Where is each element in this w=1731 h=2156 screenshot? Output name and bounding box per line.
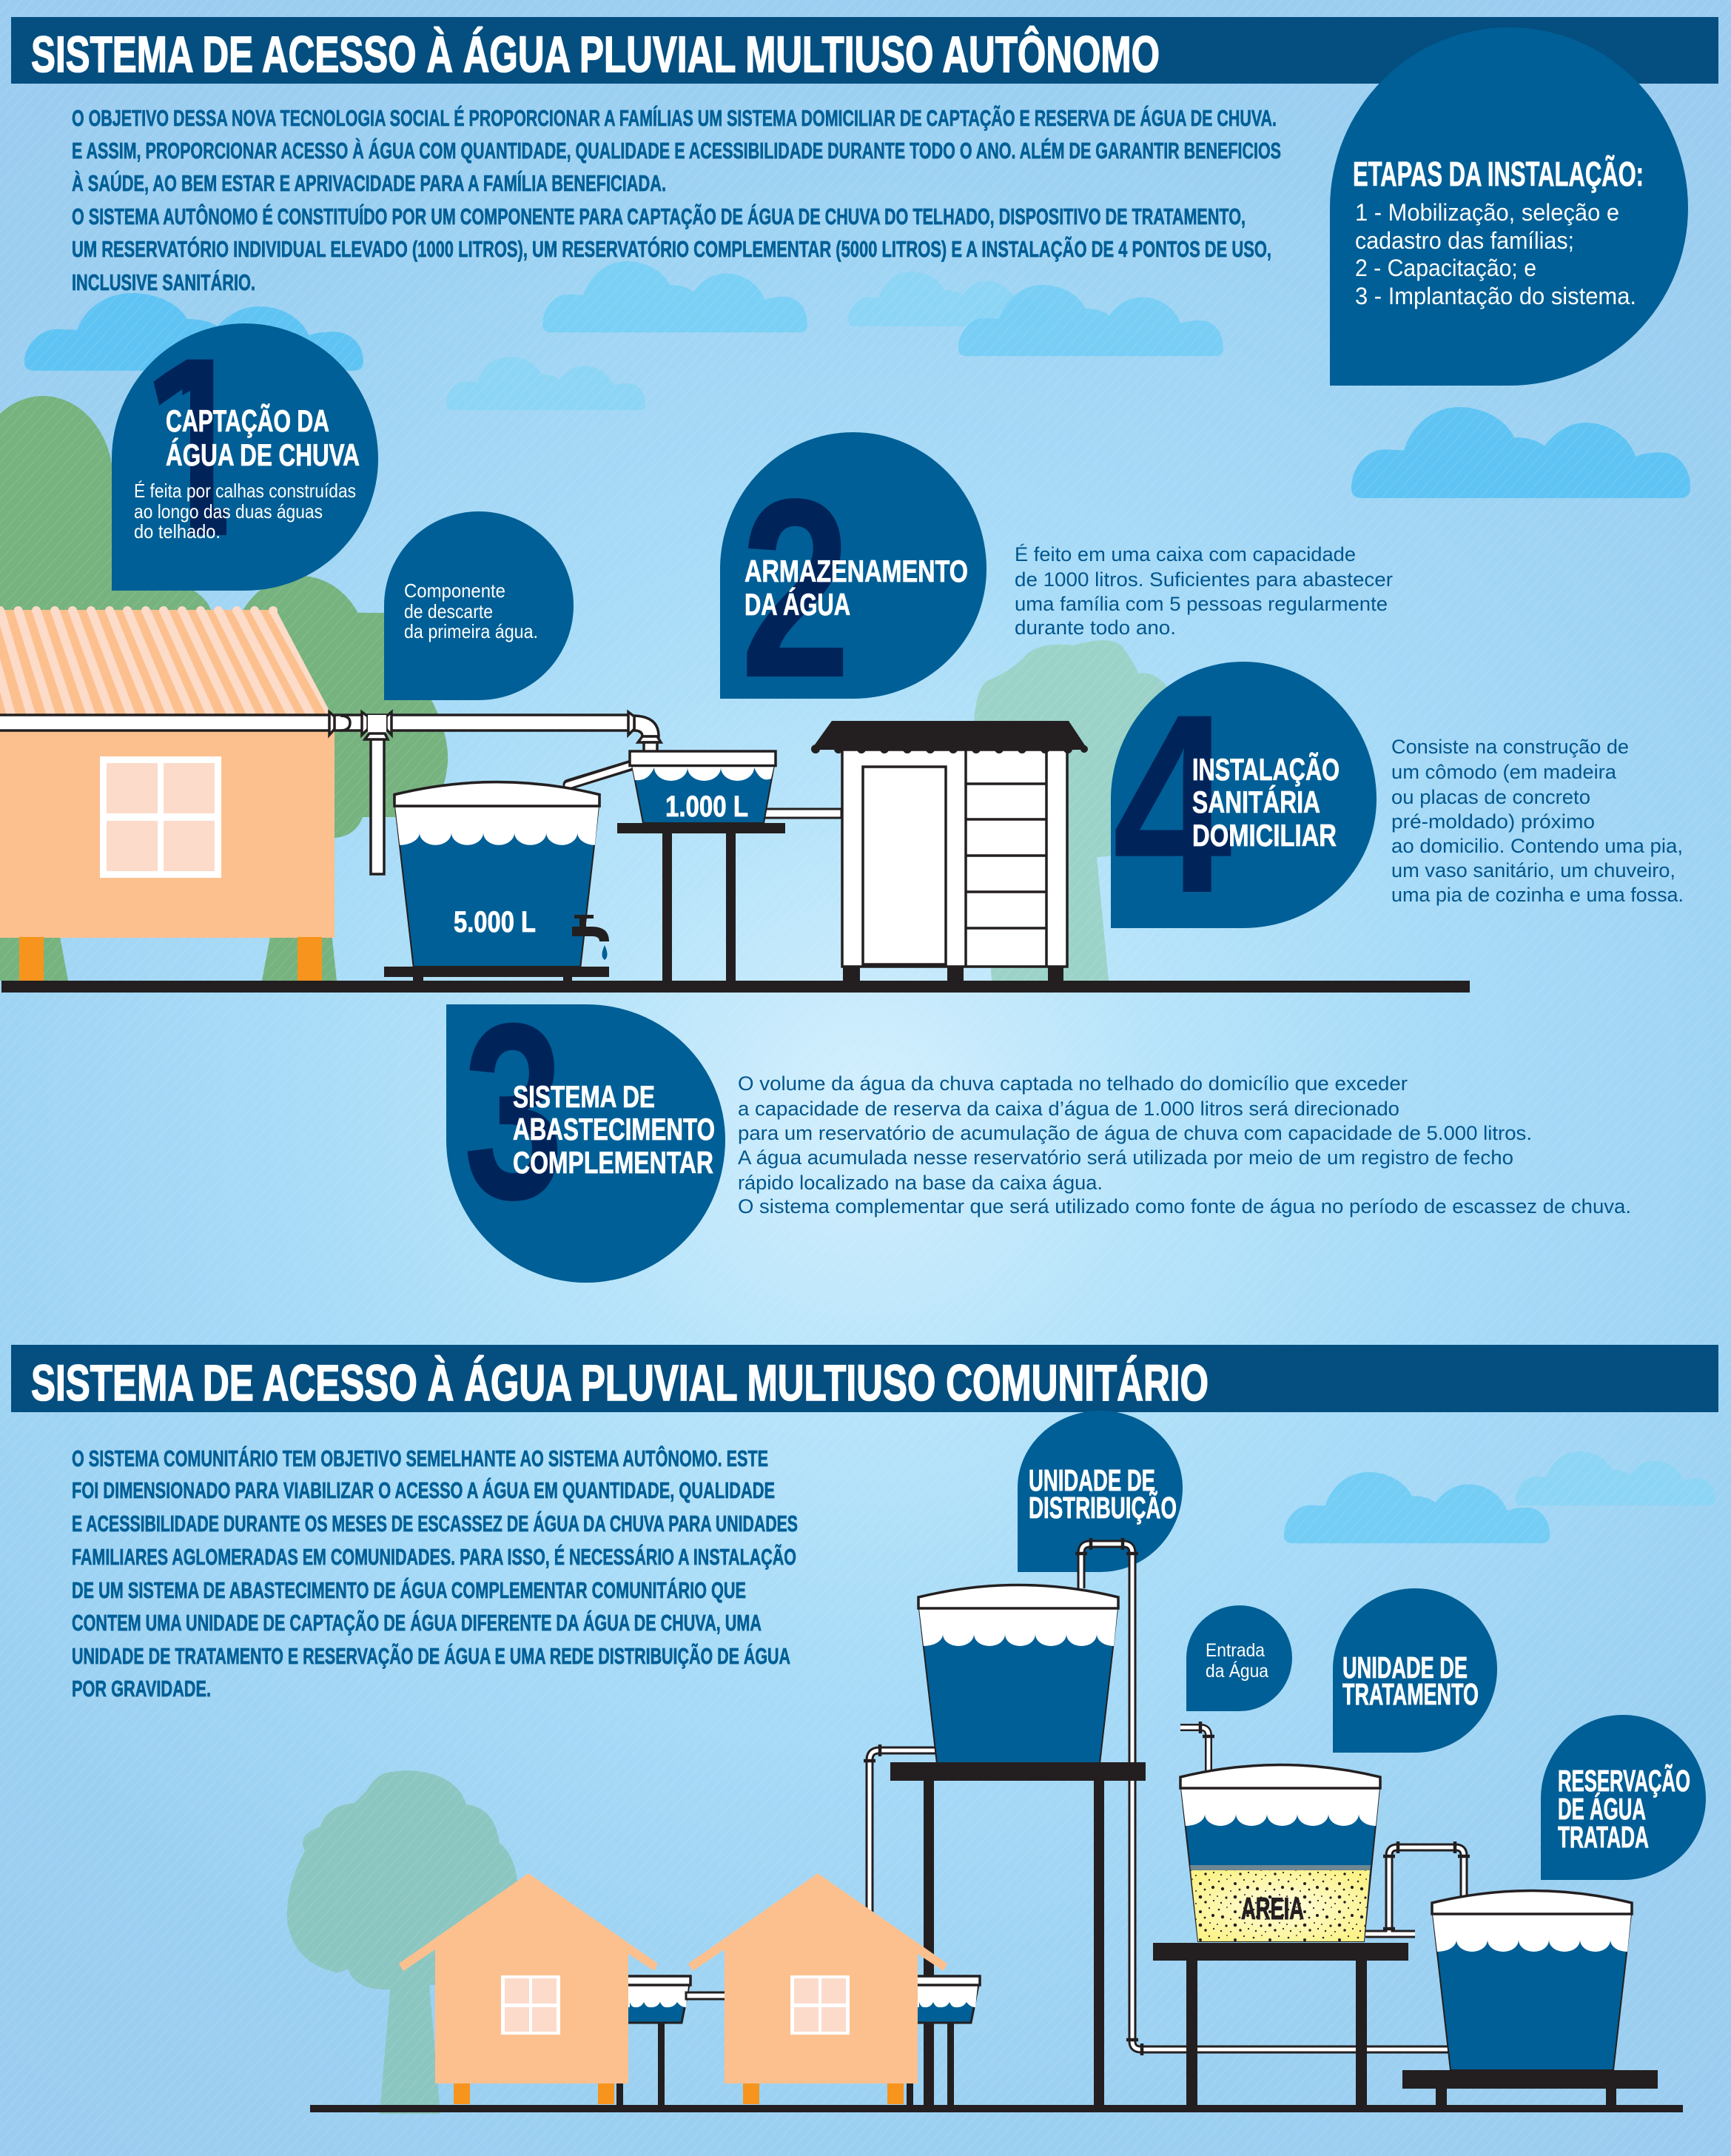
bubble: treatment unit: TRATAMENTO xyxy=(1342,1677,1479,1711)
house 1: community xyxy=(399,1873,658,2104)
ground line: autonomous system xyxy=(1,981,1470,993)
step 4 bubble: INSTALAÇÃO xyxy=(1192,752,1340,787)
step 4 bubble: DOMICILIAR xyxy=(1192,818,1337,853)
bubble: distribution unit xyxy=(1018,1411,1183,1572)
callout: first-water discard: da primeira água. xyxy=(404,620,538,642)
bubble: treated water storage: TRATADA xyxy=(1558,1820,1649,1854)
cloud: upper left xyxy=(24,293,363,371)
sanitary unit xyxy=(811,721,1088,981)
filter gravel band xyxy=(1190,1865,1371,1870)
text: step 3 description: A água acumulada nesse reservatório será utilizada por meio de um registro de fecho xyxy=(738,1146,1513,1169)
unit side panel xyxy=(966,750,1046,967)
intro paragraph: À SAÚDE, AO BEM ESTAR E APRIVACIDADE PARA A FAMÍLIA BENEFICIADA. xyxy=(72,169,666,196)
bubble: treatment unit: UNIDADE DE xyxy=(1342,1650,1468,1685)
title bar: community system: SISTEMA DE ACESSO À ÁGUA PLUVIAL MULTIUSO COMUNITÁRIO xyxy=(31,1354,1209,1411)
step 3 bubble xyxy=(446,971,725,1283)
text: step 4 description: ou placas de concreto xyxy=(1391,786,1590,808)
text: step 4 description: pré-moldado) próximo xyxy=(1391,810,1595,833)
community paragraph: UNIDADE DE TRATAMENTO E RESERVAÇÃO DE ÁGUA E UMA REDE DISTRIBUIÇÃO DE ÁGUA xyxy=(72,1643,790,1669)
bubble: treatment unit xyxy=(1333,1588,1497,1753)
text: step 3 description: para um reservatório de acumulação de água de chuva com capacidade de 5.000 litros. xyxy=(738,1122,1532,1144)
intro paragraph: UM RESERVATÓRIO INDIVIDUAL ELEVADO (1000 LITROS), UM RESERVATÓRIO COMPLEMENTAR (5000 LITROS) E A INSTALAÇÃO DE 4 PONTOS DE USO, xyxy=(72,235,1271,262)
tank body xyxy=(394,782,599,967)
intro paragraph xyxy=(72,105,1281,295)
intro paragraph: INCLUSIVE SANITÁRIO. xyxy=(72,269,255,295)
house legs xyxy=(19,937,322,981)
roof xyxy=(0,606,332,715)
step 3 bubble: SISTEMA DE xyxy=(513,1079,655,1114)
step 4 bubble xyxy=(1111,662,1377,947)
text: step 4 description: um cômodo (em madeira xyxy=(1391,761,1617,783)
bubble: treated water storage: DE ÁGUA xyxy=(1558,1792,1646,1826)
step 1 bubble: ao longo das duas águas xyxy=(134,500,323,523)
step 2 bubble: DA ÁGUA xyxy=(745,587,850,622)
text: step 2 description: uma família com 5 pessoas regularmente xyxy=(1015,593,1388,615)
tank: treated water reservoir xyxy=(1432,1890,1632,2070)
unit legs xyxy=(843,967,1063,981)
callout: water inlet xyxy=(1186,1605,1292,1711)
text: step 2 description: de 1000 litros. Suficientes para abastecer xyxy=(1015,568,1393,591)
pipe: gutter and downpipe xyxy=(0,712,661,874)
step 4 bubble: SANITÁRIA xyxy=(1192,785,1320,819)
tree: community xyxy=(287,1770,518,2114)
sand label: AREIA xyxy=(1241,1891,1304,1926)
callout: first-water discard: Componente xyxy=(404,580,505,602)
text: step 4 description: um vaso sanitário, um chuveiro, xyxy=(1391,859,1675,881)
tank stand: distribution reservoir xyxy=(890,1762,1146,2106)
step 1 bubble xyxy=(112,305,378,591)
cloud: pale right xyxy=(848,272,1048,326)
cloud: section two xyxy=(1284,1472,1550,1543)
community paragraph: CONTEM UMA UNIDADE DE CAPTAÇÃO DE ÁGUA DIFERENTE DA ÁGUA DE CHUVA, UMA xyxy=(72,1610,762,1636)
callout: water inlet: da Água xyxy=(1206,1660,1268,1682)
wall xyxy=(0,729,335,938)
tank: distribution reservoir xyxy=(918,1585,1118,1764)
panel: installation steps: 2 - Capacitação; e xyxy=(1355,255,1536,281)
panel: installation steps: cadastro das famílias; xyxy=(1355,227,1574,254)
cloud: pale centre xyxy=(446,357,645,410)
tank: sand filter xyxy=(1180,1764,1380,1941)
unit door xyxy=(863,767,946,964)
tank: 1000 litres xyxy=(617,751,841,981)
bubble: treated water storage xyxy=(1541,1715,1706,1880)
tank capacity label: 1.000 L xyxy=(665,790,748,823)
house: autonomous system xyxy=(0,606,335,981)
panel: installation steps: 3 - Implantação do sistema. xyxy=(1355,283,1636,309)
callout: water inlet: Entrada xyxy=(1206,1640,1265,1661)
community paragraph xyxy=(72,1445,798,1702)
window xyxy=(100,756,221,878)
tank: 5000 litres xyxy=(384,782,609,981)
cloud: upper centre xyxy=(542,261,807,332)
text: step 3 description xyxy=(738,1072,1631,1218)
title bar: autonomous system: SISTEMA DE ACESSO À ÁGUA PLUVIAL MULTIUSO AUTÔNOMO xyxy=(31,26,1160,83)
text: step 3 description: a capacidade de reserva da caixa d’água de 1.000 litros será direcionado xyxy=(738,1098,1399,1120)
intro paragraph: O SISTEMA AUTÔNOMO É CONSTITUÍDO POR UM COMPONENTE PARA CAPTAÇÃO DE ÁGUA DE CHUVA DO TELHADO, DISPOSITIVO DE TRATAMENTO, xyxy=(72,203,1246,229)
community paragraph: E ACESSIBILIDADE DURANTE OS MESES DE ESCASSEZ DE ÁGUA DA CHUVA PARA UNIDADES xyxy=(72,1511,798,1537)
panel: installation steps: 1 - Mobilização, seleção e xyxy=(1355,199,1619,226)
step 2 bubble xyxy=(720,432,986,731)
step 4 bubble: 4 xyxy=(1112,662,1234,947)
text: step 3 description: O volume da água da chuva captada no telhado do domicílio que exceder xyxy=(738,1072,1408,1095)
step 1 bubble: É feita por calhas construídas xyxy=(134,480,356,502)
text: step 3 description: rápido localizado na base da caixa água. xyxy=(738,1172,1103,1194)
pipes: community network xyxy=(864,1538,1470,2055)
tank capacity label: 5.000 L xyxy=(454,906,536,938)
cloud: lower right xyxy=(1351,407,1690,498)
bubble: distribution unit: UNIDADE DE xyxy=(1029,1463,1155,1497)
tank stand: treated water reservoir xyxy=(1402,2070,1658,2106)
step 3 bubble: COMPLEMENTAR xyxy=(513,1145,713,1180)
ground line: community system xyxy=(310,2105,1683,2112)
community paragraph: POR GRAVIDADE. xyxy=(72,1676,211,1702)
step 1 bubble: do telhado. xyxy=(134,520,221,543)
step 3 bubble: ABASTECIMENTO xyxy=(513,1112,715,1146)
tank stand: sand filter xyxy=(1153,1943,1408,2106)
unit roof xyxy=(811,721,1088,753)
text: step 4 description: Consiste na construção de xyxy=(1391,736,1629,758)
step 3 bubble: 3 xyxy=(463,971,564,1252)
tank stand xyxy=(617,823,785,981)
trees behind the house xyxy=(0,396,448,981)
tank base xyxy=(384,967,609,981)
step 1 bubble: 1 xyxy=(130,305,255,590)
text: step 2 description: É feito em uma caixa com capacidade xyxy=(1015,543,1356,565)
household tank 1 xyxy=(616,1976,727,2106)
outlet pipe xyxy=(759,809,841,818)
callout: first-water discard: de descarte xyxy=(404,600,493,622)
step 2 bubble: ARMAZENAMENTO xyxy=(745,554,968,588)
step 1 bubble: ÁGUA DE CHUVA xyxy=(166,437,360,472)
faucet xyxy=(572,915,609,941)
callout: first-water discard xyxy=(384,511,574,700)
sand layer xyxy=(1191,1870,1370,1941)
community paragraph: FOI DIMENSIONADO PARA VIABILIZAR O ACESSO A ÁGUA EM QUANTIDADE, QUALIDADE xyxy=(72,1477,775,1503)
bubble: distribution unit: DISTRIBUIÇÃO xyxy=(1029,1491,1177,1525)
text: step 2 description: durante todo ano. xyxy=(1015,617,1176,639)
unit walls xyxy=(842,750,1067,967)
panel: installation steps xyxy=(1330,27,1688,386)
cloud: pale section two xyxy=(1516,1451,1715,1505)
text: step 3 description: O sistema complementar que será utilizado como fonte de água no período de escassez de chuva. xyxy=(738,1195,1631,1218)
cloud: centre right xyxy=(958,285,1223,356)
water drop xyxy=(602,945,607,960)
community paragraph: O SISTEMA COMUNITÁRIO TEM OBJETIVO SEMELHANTE AO SISTEMA AUTÔNOMO. ESTE xyxy=(72,1445,768,1471)
house 2: community xyxy=(688,1873,947,2104)
text: step 4 description: ao domicilio. Contendo uma pia, xyxy=(1391,835,1683,857)
community paragraph: DE UM SISTEMA DE ABASTECIMENTO DE ÁGUA COMPLEMENTAR COMUNITÁRIO QUE xyxy=(72,1577,746,1603)
household tank 2 xyxy=(907,1976,980,2106)
step 2 bubble: 2 xyxy=(740,446,851,731)
tree behind the sanitary unit xyxy=(974,640,1184,981)
step 1 bubble: CAPTAÇÃO DA xyxy=(166,403,329,438)
text: step 4 description xyxy=(1391,736,1684,906)
community paragraph: FAMILIARES AGLOMERADAS EM COMUNIDADES. PARA ISSO, É NECESSÁRIO A INSTALAÇÃO xyxy=(72,1544,796,1570)
text: step 2 description xyxy=(1015,543,1393,639)
text: step 4 description: uma pia de cozinha e uma fossa. xyxy=(1391,884,1684,906)
